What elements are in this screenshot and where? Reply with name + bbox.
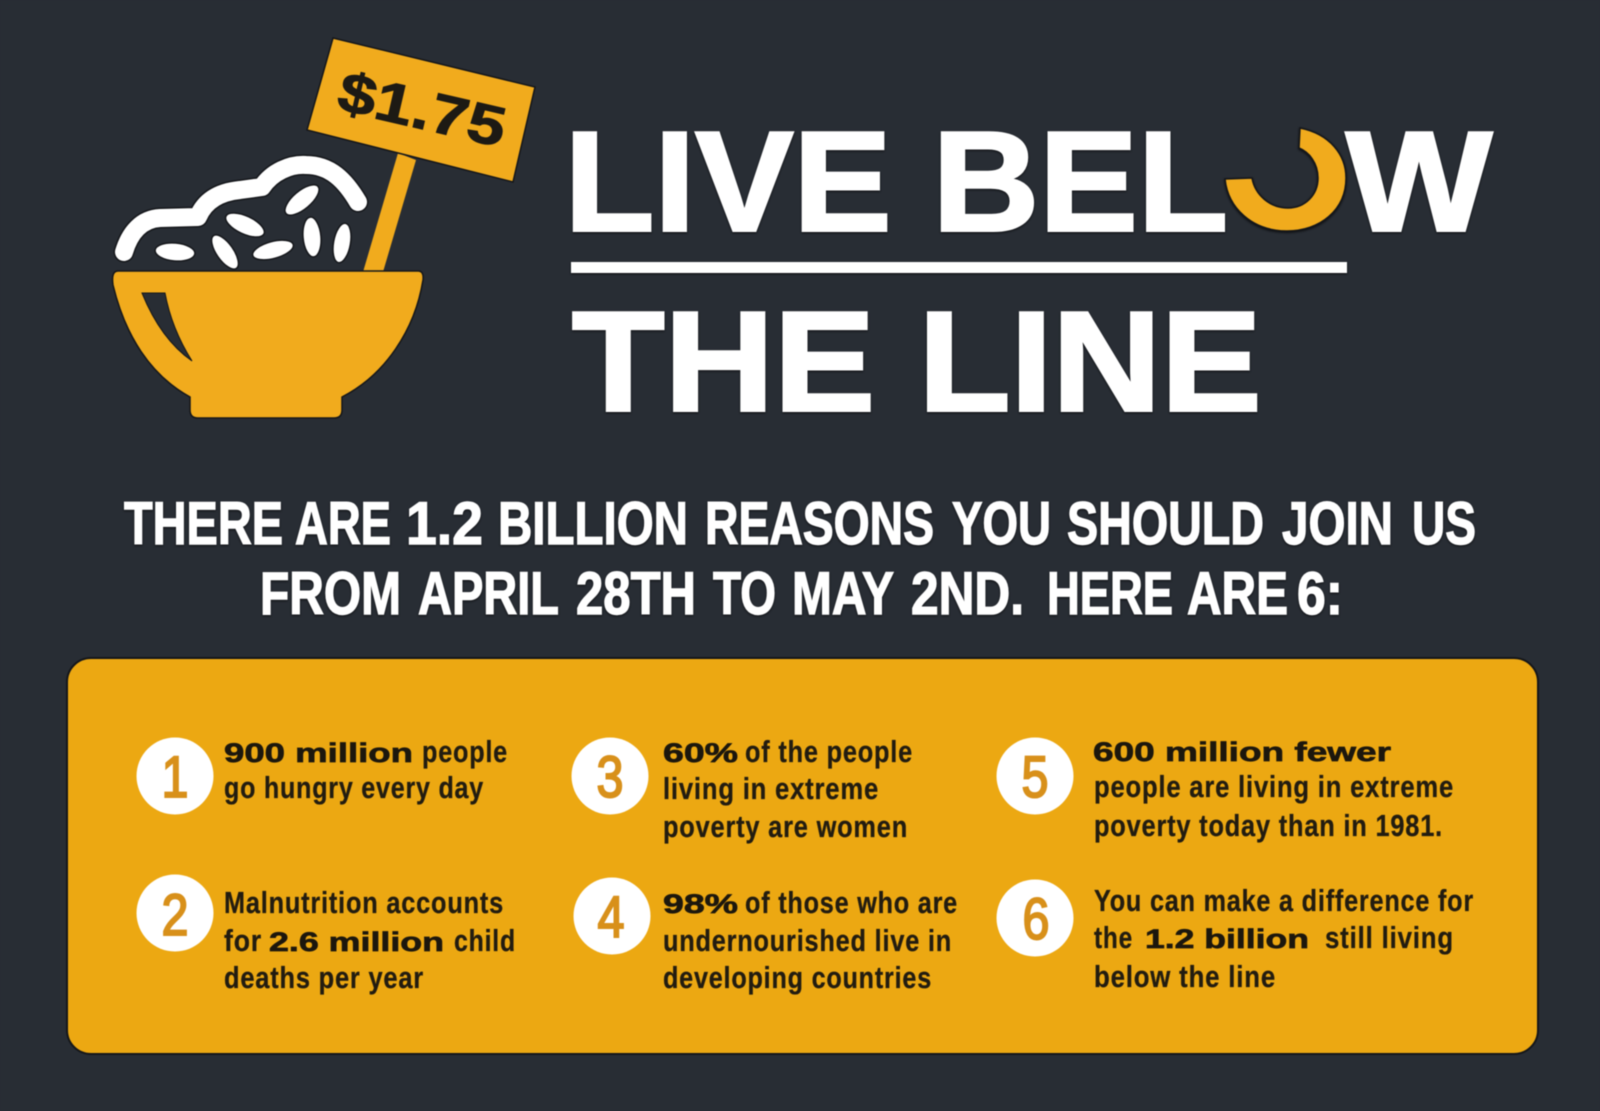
number badge 3: 3 <box>596 745 624 810</box>
subtitle line 1: 1.2 <box>406 490 483 557</box>
number badge 2: 2 <box>162 883 188 948</box>
title: BEL: BEL <box>932 102 1228 262</box>
reason 3 text <box>663 734 913 844</box>
reason 6 text: the <box>1094 920 1133 955</box>
reason 3 text: living in extreme <box>663 771 879 806</box>
number badge 6: 6 <box>1022 887 1050 952</box>
reason 4 text: of those who are <box>745 885 958 920</box>
subtitle line 2: APRIL <box>418 560 559 627</box>
subtitle line 2: MAY <box>792 560 894 627</box>
panel: six reasons <box>67 658 1538 1054</box>
subtitle line 1: JOIN <box>1282 490 1393 557</box>
subtitle line 1: YOU <box>952 490 1051 557</box>
reason 6 text: below the line <box>1094 959 1276 994</box>
reason 2 text: child <box>454 923 516 958</box>
subtitle line 1: SHOULD <box>1067 490 1264 557</box>
reason 2 text: Malnutrition accounts <box>224 885 504 920</box>
reason 2 text: for <box>224 923 262 958</box>
subtitle line 2: HERE <box>1047 560 1173 627</box>
rice mound outline <box>124 165 358 252</box>
reason 6 text: still living <box>1325 920 1454 955</box>
reason 6 <box>996 880 1474 994</box>
title: THE: THE <box>572 282 875 442</box>
rice grains <box>154 180 354 273</box>
reason 3 <box>572 734 913 844</box>
number badge 5 <box>996 738 1074 814</box>
title: LINE: LINE <box>918 282 1262 442</box>
number badge 1: 1 <box>162 745 188 810</box>
reason 1 text: people <box>422 734 508 769</box>
subtitle <box>124 490 1476 627</box>
reason 2 text <box>224 885 516 995</box>
reason 6 text: 1.2 billion <box>1145 924 1309 954</box>
reason 4 text: undernourished live in <box>663 923 952 958</box>
reason 6 text: You can make a difference for <box>1094 883 1474 918</box>
number badge 6 <box>996 880 1074 956</box>
subtitle line 2: 6: <box>1297 560 1343 627</box>
reason 5 <box>996 737 1454 843</box>
subtitle line 2: 28TH <box>576 560 696 627</box>
subtitle line 2: 2ND. <box>911 560 1024 627</box>
subtitle line 2: FROM <box>260 560 401 627</box>
icon: letter O as open ring <box>1225 128 1346 231</box>
reason 5 text: 600 million fewer <box>1093 737 1392 767</box>
number badge 3 <box>572 738 648 814</box>
number badge 1 <box>136 738 214 814</box>
reason 5 text <box>1093 737 1454 843</box>
title: LIVE: LIVE <box>564 102 892 262</box>
bowl <box>113 271 423 418</box>
subtitle line 2 <box>260 560 1343 627</box>
reason 1 text <box>224 734 508 805</box>
icon: rice bowl with price sign <box>113 38 535 418</box>
reason 1 text: 900 million <box>224 738 413 768</box>
price sign board <box>307 38 535 182</box>
price sign post <box>363 153 416 272</box>
reason 1 <box>136 734 508 814</box>
subtitle line 1: BILLION <box>498 490 688 557</box>
reason 3 text: of the people <box>745 734 913 769</box>
reason 3 text: 60% <box>663 738 738 768</box>
number badge 4 <box>574 878 650 954</box>
reason 1 text: go hungry every day <box>224 770 484 805</box>
rice mound <box>124 165 358 252</box>
reason 6 text <box>1094 883 1474 994</box>
number badge 2 <box>136 874 214 952</box>
title <box>564 102 1492 442</box>
reason 5 text: poverty today than in 1981. <box>1094 808 1443 843</box>
reason 2 <box>136 874 516 995</box>
panel background <box>67 658 1538 1054</box>
subtitle line 1: ARE <box>295 490 391 557</box>
reason 4 text: 98% <box>663 889 738 919</box>
reason 3 text: poverty are women <box>663 809 908 844</box>
reason 4 <box>574 878 958 995</box>
subtitle line 1: REASONS <box>705 490 934 557</box>
reason 4 text: developing countries <box>663 960 932 995</box>
reason 2 text: 2.6 million <box>269 927 444 957</box>
number badge 4: 4 <box>598 885 624 950</box>
reason 2 text: deaths per year <box>224 960 424 995</box>
title rule <box>571 262 1347 273</box>
reason 5 text: people are living in extreme <box>1094 769 1454 804</box>
price label: $1.75 <box>332 59 512 159</box>
number badge 5: 5 <box>1022 745 1048 810</box>
reason 4 text <box>663 885 958 995</box>
bowl highlight <box>142 293 192 361</box>
subtitle line 2: ARE <box>1187 560 1288 627</box>
subtitle line 1 <box>124 490 1476 557</box>
subtitle line 1: THERE <box>124 490 283 557</box>
subtitle line 2: TO <box>713 560 776 627</box>
subtitle line 1: US <box>1412 490 1476 557</box>
title: W: W <box>1346 102 1492 262</box>
